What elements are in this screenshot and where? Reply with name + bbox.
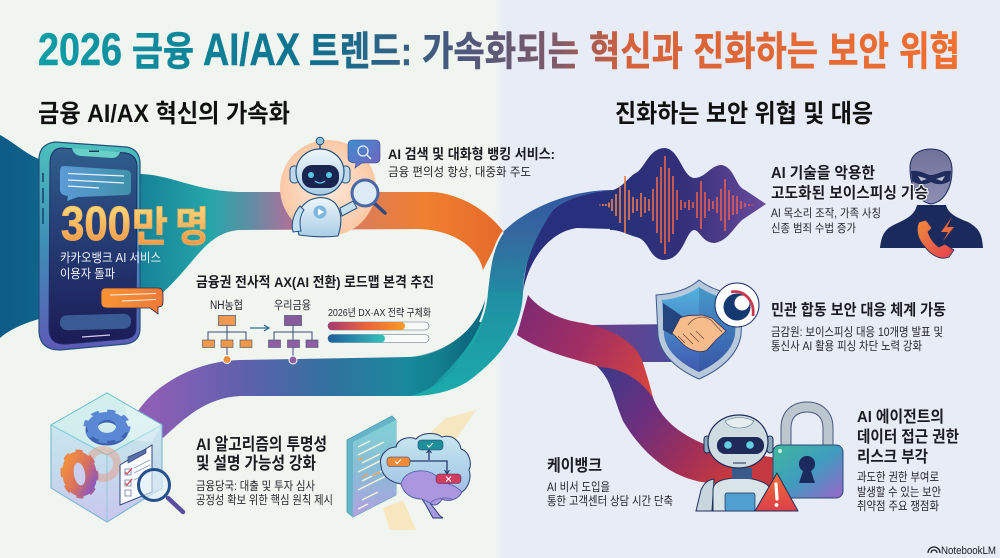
ribbon: top teal to orange flow [0, 135, 503, 338]
text block: AI agent risk: 발생할 수 있는 보안 [857, 485, 941, 499]
chat bubble blue [60, 166, 131, 201]
chart: strategy progress bars: 2026년 DX·AX 전략 구체화 [328, 307, 431, 319]
phone caption: 카카오뱅크 AI 서비스 [60, 251, 161, 265]
text block: AI agent risk: 취약점 주요 쟁점화 [857, 498, 939, 513]
text block: voice phishing: 고도화된 보이스피싱 기승 [771, 184, 928, 202]
warning triangle [755, 473, 798, 511]
ribbon: magenta red upper flow [517, 295, 653, 398]
title: AI/AX [203, 24, 300, 75]
text block: AI algorithm transparency: 공정성 확보 위한 핵심 원칙 제시 [196, 493, 333, 507]
text block: AI agent risk: 리스크 부각 [857, 448, 928, 466]
text block: K bank [547, 456, 673, 508]
text block: AI algorithm transparency: AI 알고리즘의 투명성 [196, 434, 327, 454]
title: 트렌드: [309, 30, 412, 74]
text block: public-private response: 민관 합동 보안 대응 체계 가동 [771, 301, 946, 319]
icon: agent robot [696, 415, 798, 511]
icon: shield with handshake [656, 280, 759, 379]
text block: AI agent risk [857, 408, 959, 513]
title: 2026 [38, 24, 122, 75]
text block: AI search: AI 검색 및 대화형 뱅킹 서비스: [388, 146, 555, 162]
heading: right section: 진화하는 보안 위협 및 대응 [615, 100, 873, 128]
phone caption [60, 251, 161, 281]
title: 보안 [828, 30, 889, 74]
icon: brain with code panel [347, 410, 476, 530]
text block: AI search [388, 146, 555, 179]
text block: voice phishing: AI 기술을 악용한 [771, 164, 875, 182]
title: 가속화되는 [422, 30, 579, 74]
text block: AI search: 금융 편의성 항상, 대중화 주도 [388, 165, 531, 179]
text block: K bank: 통한 고객센터 상담 시간 단축 [547, 494, 673, 508]
stat: 300만 명: 명 [175, 204, 209, 250]
arrow: NH to Woori [250, 325, 269, 331]
text block: voice phishing: AI 목소리 조작, 가족 사칭 [771, 207, 881, 220]
ribbon: bright teal lower band [410, 292, 523, 396]
icon: waveform [600, 148, 766, 260]
title: 위협 [899, 30, 960, 74]
heading: left section: 금융 AI/AX 혁신의 가속화 [38, 100, 290, 128]
ribbon halo [480, 232, 503, 322]
icon: padlock [773, 407, 843, 498]
blue gear [86, 411, 128, 442]
text block: AI algorithm transparency [196, 434, 333, 507]
chart: Woori org tree [268, 299, 318, 364]
chat bubble orange [101, 288, 163, 314]
phone caption: 이용자 돌파 [60, 267, 115, 281]
chart: NH org tree [202, 299, 252, 364]
ribbon: blue rising band [487, 190, 612, 292]
magnifier [138, 470, 183, 512]
ribbon: purple-red lower flow [580, 343, 778, 490]
emblem: taegeuk seal [715, 283, 759, 327]
chart: NH org tree: NH농협 [210, 299, 243, 312]
ribbon: navy inner fold [523, 190, 612, 292]
title: 금융 [132, 30, 194, 74]
orange gear [59, 449, 100, 499]
text block: AI agent risk: 데이터 접근 권한 [857, 428, 959, 446]
icon: smartphone [39, 142, 209, 350]
text block: public-private response [771, 301, 946, 353]
icon: robot with magnifier [280, 137, 385, 237]
ribbon: horizontal to shield [590, 324, 680, 362]
title: 진화하는 [693, 30, 818, 74]
title [38, 24, 960, 75]
text block: AI agent risk: AI 에이전트의 [857, 408, 944, 426]
stat: 300만 명: 만 [132, 204, 168, 250]
text block: AI algorithm transparency: 및 설명 가능성 강화 [196, 454, 316, 473]
text block: K bank: AI 비서 도입을 [547, 480, 610, 494]
heading: AX roadmap: 금융권 전사적 AX(AI 전환) 로드맵 본격 추진 [196, 274, 434, 290]
icon: masked hacker [880, 149, 983, 258]
stat: 300만 명: 300 [61, 198, 131, 251]
icon: transparent cube with gears [51, 393, 183, 522]
handshake [663, 303, 726, 352]
text block: AI agent risk: 과도한 권한 부여로 [857, 470, 939, 484]
ribbon fold shade [405, 292, 487, 396]
text block: public-private response: 금감원: 보이스피싱 대응 10개명 발표 및 [771, 325, 943, 339]
faded gear behind [89, 450, 117, 478]
text block: K bank: 케이뱅크 [547, 456, 602, 475]
stat: 300만 명 [61, 198, 209, 251]
chart: Woori org tree: 우리금융 [274, 299, 311, 312]
text block: AI algorithm transparency: 금융당국: 대출 및 투자 심사 [196, 479, 315, 493]
ribbon: purple to teal flow [138, 292, 523, 438]
text block: voice phishing: 신종 범죄 수법 증가 [771, 222, 856, 235]
text block: public-private response: 통신사 AI 활용 피싱 차단 노력 강화 [771, 339, 922, 353]
chart: strategy progress bars [328, 307, 431, 342]
title: 혁신과 [589, 30, 683, 74]
text block: voice phishing [771, 164, 928, 235]
clipboard [120, 445, 152, 505]
search bubble [348, 140, 380, 168]
